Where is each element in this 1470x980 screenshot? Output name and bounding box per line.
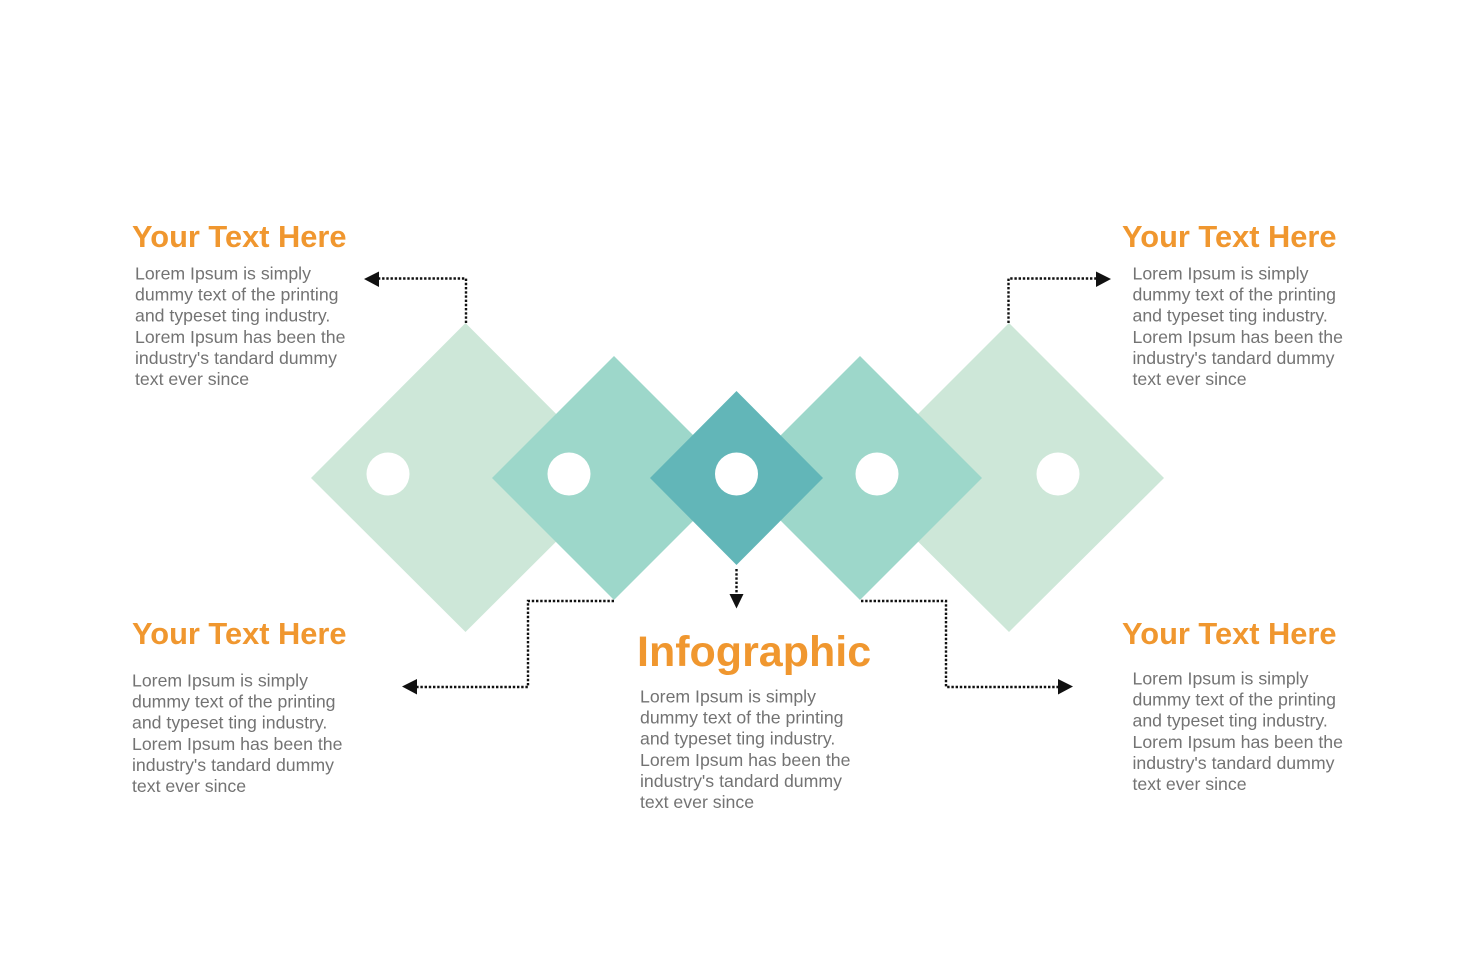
text block: top left: Lorem Ipsum is simply (135, 264, 311, 284)
text block: centre: Lorem Ipsum is simply (640, 686, 816, 706)
text block: top right: Lorem Ipsum has been the (1132, 327, 1343, 347)
circle: far right (1036, 452, 1080, 496)
text block: top right: industry's tandard dummy (1132, 348, 1335, 368)
diamond chain (311, 323, 1164, 632)
text block: top left: and typeset ting industry. (135, 306, 330, 326)
text block: bottom left: and typeset ting industry. (132, 713, 327, 733)
text block: bottom left: industry's tandard dummy (132, 755, 334, 775)
heading: top right: Your Text Here (1122, 219, 1336, 254)
text block: top left: Lorem Ipsum has been the (135, 327, 346, 347)
arrow: bottom right (861, 601, 1073, 694)
text block: bottom right: and typeset ting industry. (1132, 711, 1328, 731)
text block: bottom right: Lorem Ipsum has been the (1132, 732, 1343, 752)
text block: top right: Lorem Ipsum is simply (1132, 264, 1309, 284)
arrow: top right (1008, 272, 1111, 323)
text block: centre: and typeset ting industry. (640, 729, 835, 749)
text block: centre: Lorem Ipsum has been the (640, 750, 851, 770)
text block: bottom left: text ever since (132, 776, 246, 796)
arrow: centre down (730, 569, 744, 608)
text block: bottom left: Lorem Ipsum has been the (132, 734, 343, 754)
diamond: far left (311, 323, 620, 632)
circle: inner left (548, 452, 590, 496)
text block: top right: text ever since (1132, 369, 1247, 389)
text block: top right: and typeset ting industry. (1132, 306, 1328, 326)
arrow: top left (364, 272, 466, 323)
diamond: inner right (738, 356, 982, 600)
text block: bottom right: industry's tandard dummy (1132, 753, 1335, 773)
circle: centre (715, 452, 758, 496)
circle: far left (366, 452, 410, 496)
text block: bottom right: dummy text of the printing (1132, 690, 1336, 710)
text block: top left: industry's tandard dummy (135, 348, 337, 368)
text block: bottom left: dummy text of the printing (132, 692, 336, 712)
heading: bottom left: Your Text Here (132, 616, 346, 651)
diamond: inner left (492, 356, 736, 600)
text block: top left: dummy text of the printing (135, 285, 339, 305)
text block: bottom left: Lorem Ipsum is simply (132, 670, 308, 690)
circle: inner right (856, 452, 898, 496)
arrow: bottom left (402, 601, 614, 694)
diamond: centre (650, 391, 823, 565)
text block: top left: text ever since (135, 369, 249, 389)
heading: bottom right: Your Text Here (1122, 616, 1336, 651)
text block: centre: industry's tandard dummy (640, 771, 842, 791)
heading: top left: Your Text Here (132, 219, 346, 254)
text block: top right: dummy text of the printing (1132, 285, 1336, 305)
heading: centre title: Infographic (637, 628, 871, 676)
text block: bottom right: Lorem Ipsum is simply (1132, 668, 1309, 688)
diamond: far right (854, 323, 1164, 632)
text block: bottom right: text ever since (1132, 774, 1247, 794)
text block: centre: dummy text of the printing (640, 708, 844, 728)
text block: centre: text ever since (640, 792, 754, 812)
